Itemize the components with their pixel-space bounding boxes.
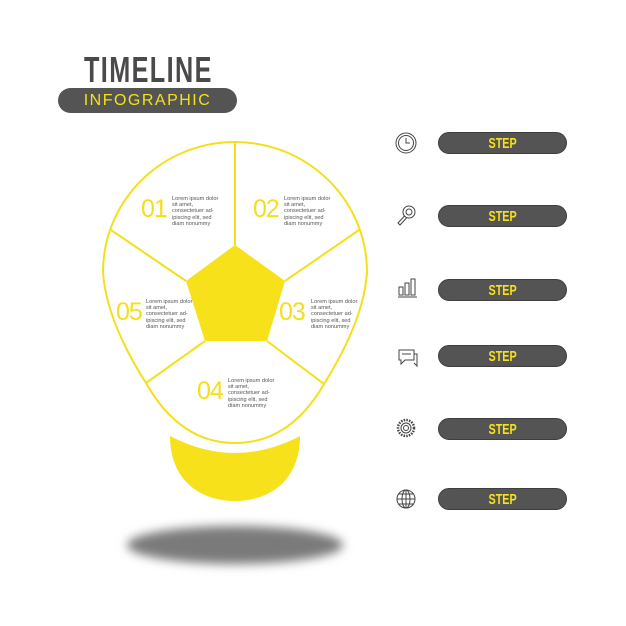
subtitle pill: [58, 88, 237, 113]
segment 01: 01: [141, 195, 167, 223]
center pentagon: [186, 245, 285, 341]
segment 04: 04: [197, 377, 223, 405]
text: Lorem ipsum dolor sit amet, consectetuer ad-ipiscing elit, sed diam nonummy: [146, 299, 192, 330]
step 3: STEP: [488, 282, 517, 299]
step 6: [438, 488, 567, 510]
subtitle pill: INFOGRAPHIC: [84, 92, 211, 109]
title: TIMELINE: [84, 49, 213, 90]
segment 02: 02: [253, 195, 279, 223]
icon: clock: [396, 133, 416, 153]
step 1: [438, 132, 567, 154]
text: Lorem ipsum dolor sit amet, consectetuer ad-ipiscing elit, sed diam nonummy: [172, 196, 218, 227]
bulb outline: [103, 142, 367, 443]
bulb base: [170, 436, 300, 501]
segment 03: 03: [279, 298, 305, 326]
step 5: STEP: [488, 421, 517, 438]
step 1: STEP: [488, 135, 517, 152]
icons: [396, 132, 418, 508]
text: Lorem ipsum dolor sit amet, consectetuer ad-ipiscing elit, sed diam nonummy: [311, 299, 357, 330]
step 2: [438, 205, 567, 227]
icon: globe: [397, 490, 415, 508]
step 4: [438, 345, 567, 367]
shadow: [127, 526, 343, 564]
segment 05: 05: [116, 298, 142, 326]
step 4: STEP: [488, 348, 517, 365]
step 2: STEP: [488, 208, 517, 225]
step 3: [438, 279, 567, 301]
icon: chat: [399, 350, 417, 366]
step 6: STEP: [488, 491, 517, 508]
icon: bar chart: [398, 279, 417, 297]
step 5: [438, 418, 567, 440]
text: Lorem ipsum dolor sit amet, consectetuer ad-ipiscing elit, sed diam nonummy: [228, 378, 274, 409]
text: Lorem ipsum dolor sit amet, consectetuer ad-ipiscing elit, sed diam nonummy: [284, 196, 330, 227]
icon: magnifier: [398, 206, 415, 225]
icon: gear: [398, 420, 414, 436]
